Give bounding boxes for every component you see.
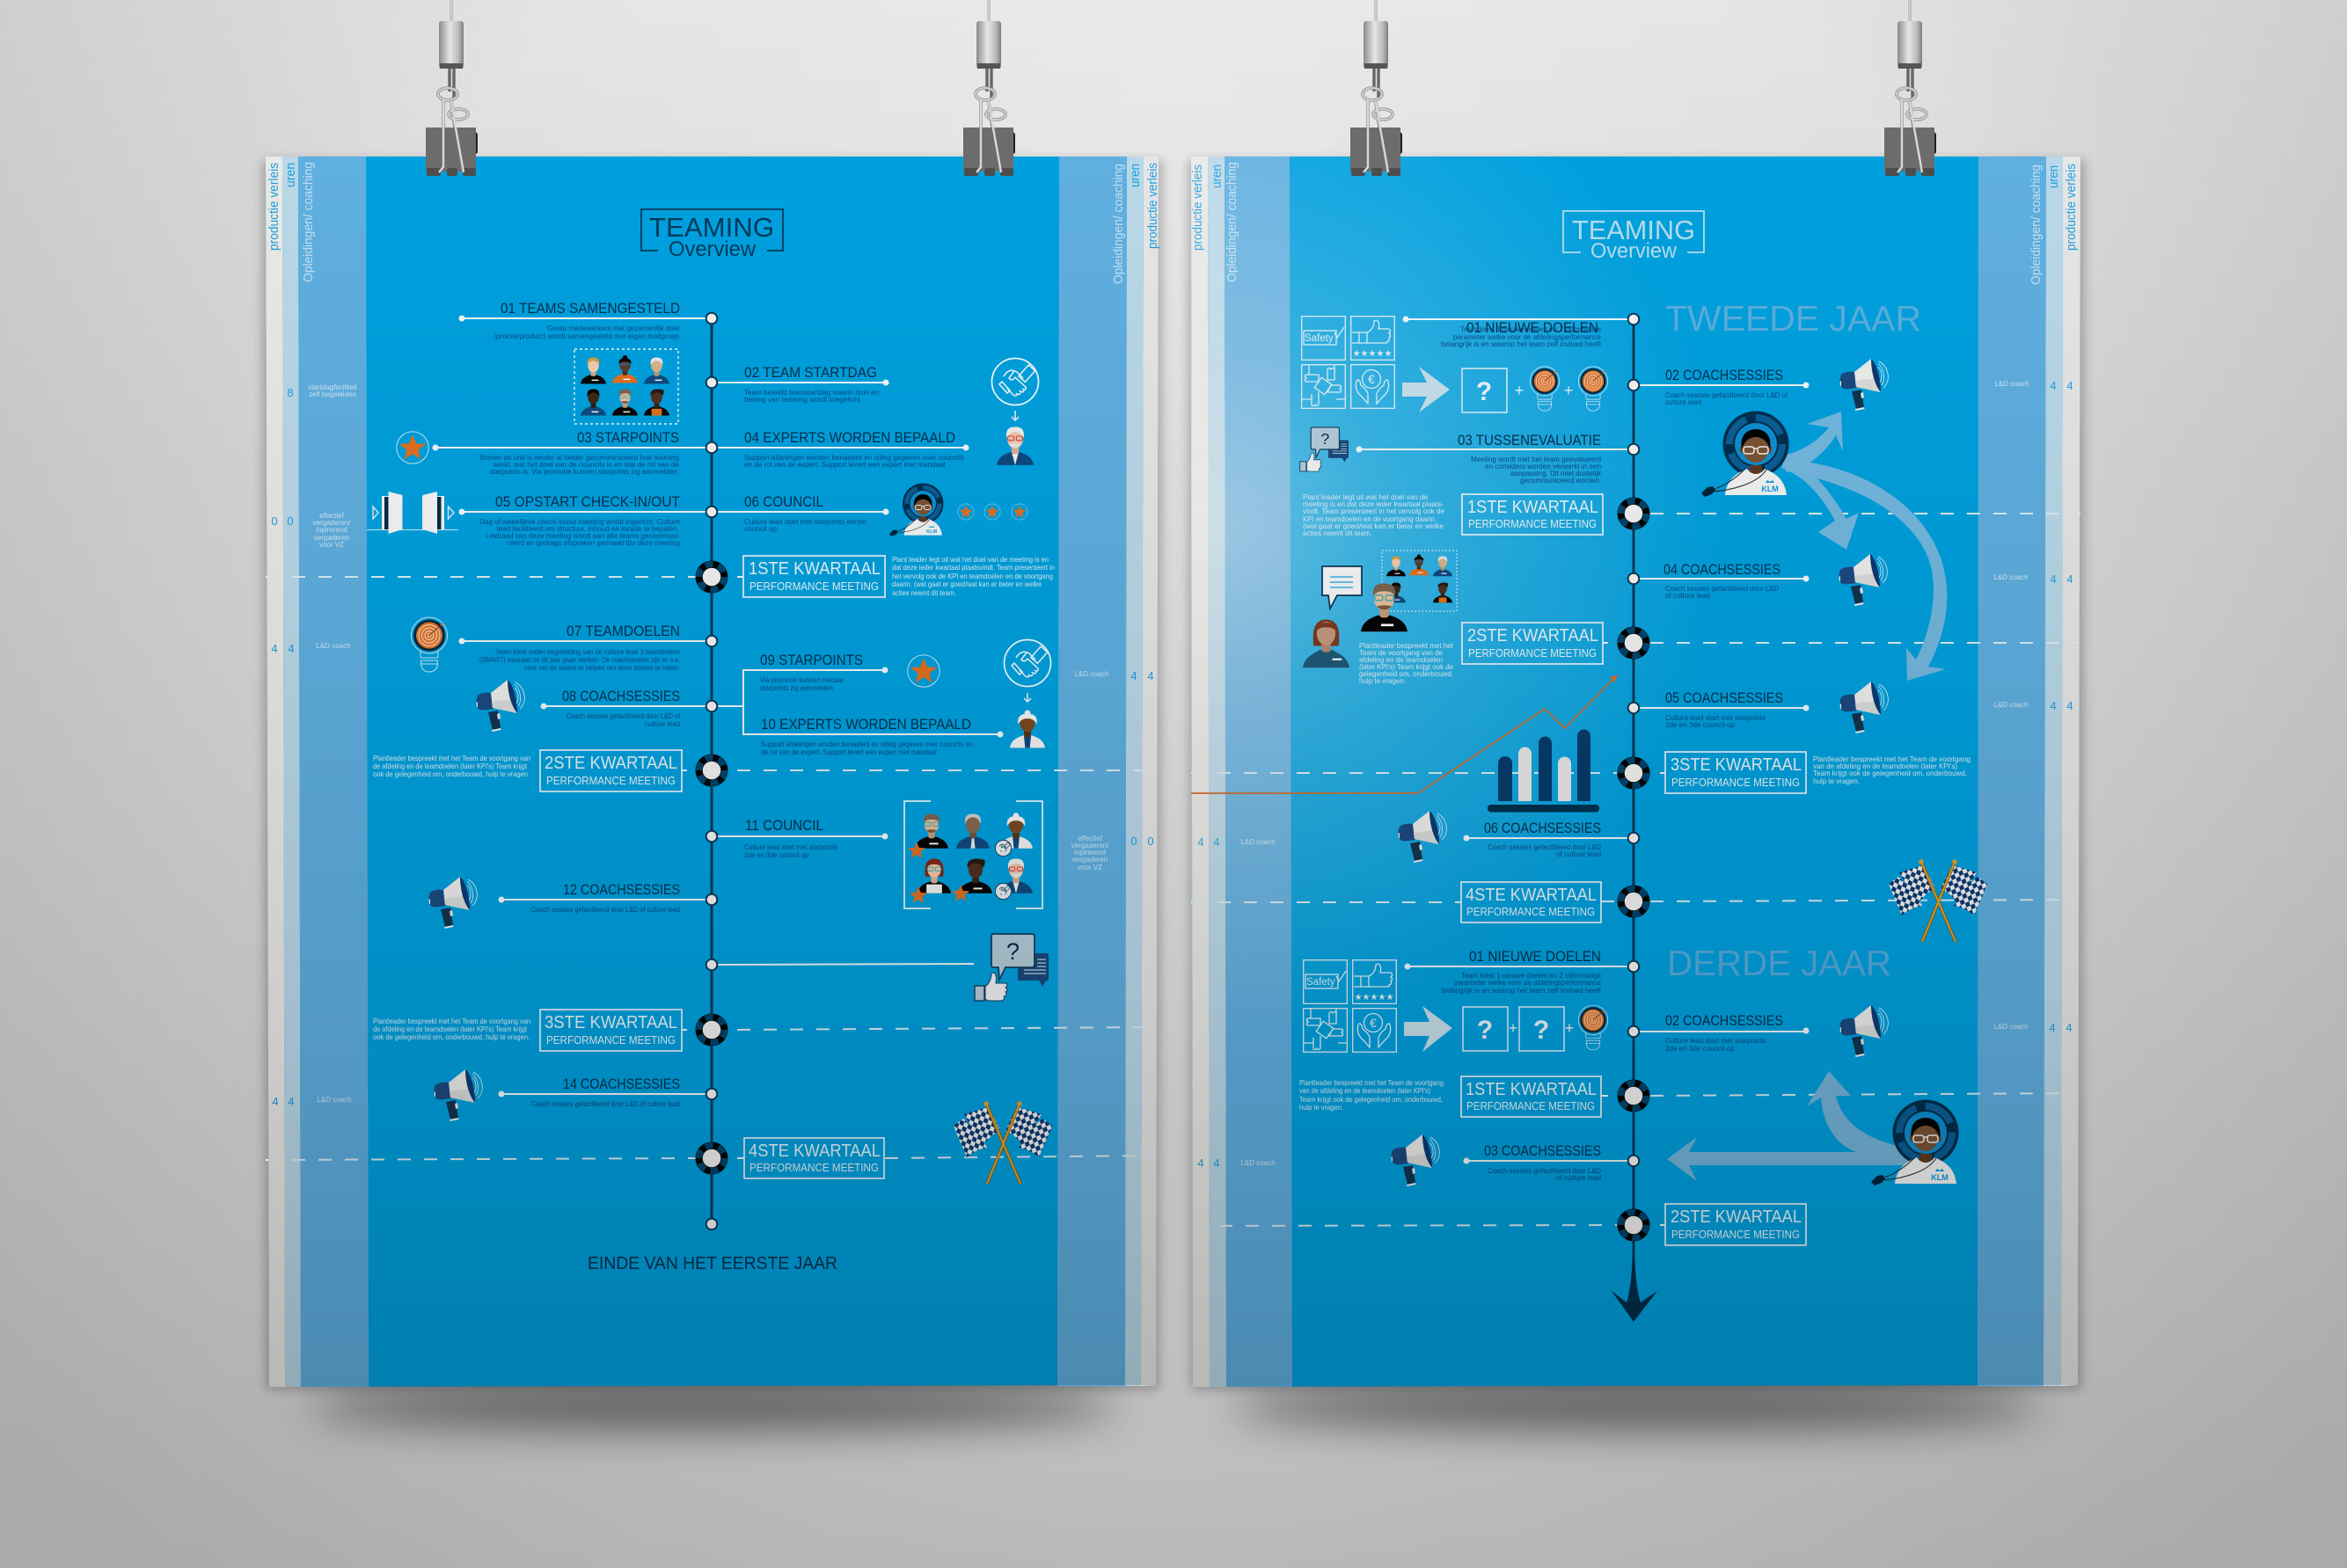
- step 06 council: council op: [744, 525, 778, 533]
- 2ste kwartaal box year 3: [1660, 1204, 1806, 1245]
- 2ste kwartaal box year 2: PERFORMANCE MEETING: [1468, 646, 1597, 660]
- 3ste kwartaal box year 2: [1660, 752, 1806, 793]
- plant leader meeting illustration: [1303, 551, 1457, 667]
- stripe notes left: 4: [1213, 835, 1220, 849]
- 1ste kwartaal description year 3: [1299, 1079, 1444, 1112]
- stripe notes left: 0: [287, 514, 294, 528]
- council portrait grid: [904, 801, 1042, 908]
- 3ste kwartaal description: ook de gelegenheid om, onderbouwd, hulp te vragen.: [373, 1033, 530, 1041]
- 1ste kwartaal box year 2: PERFORMANCE MEETING: [1468, 517, 1597, 530]
- 2ste kwartaal box year 2: 2STE KWARTAAL: [1467, 626, 1598, 645]
- year 3 step 01 nieuwe doelen: belangrijk is en waarop het team zelf invloed heeft: [1442, 987, 1602, 995]
- step 04 experts worden bepaald: 04 EXPERTS WORDEN BEPAALD: [744, 429, 955, 446]
- year 2 step 02 coachsessies: culture lead: [1665, 398, 1701, 406]
- year 2 goal icons: [1302, 317, 1608, 412]
- clips poster 2: [1350, 0, 1938, 176]
- year 2 step 02 coachsessies: Coach sessies gefaciliteerd door L&D of: [1665, 391, 1788, 399]
- stripe notes left: effectief: [319, 512, 345, 520]
- coach feedback arrows year 3: [1667, 1071, 1909, 1181]
- title poster 2: [1563, 211, 1704, 263]
- column headers left: [267, 162, 316, 282]
- column headers right: productie verleis: [2064, 164, 2079, 251]
- step 05 opstart check-in/out: 05 OPSTART CHECK-IN/OUT: [495, 493, 680, 510]
- stripe notes left: vergaderen/: [313, 519, 351, 527]
- stripe notes right: [1071, 669, 1154, 872]
- 2ste kwartaal description year 2: Plantleader bespreekt met het: [1359, 642, 1454, 650]
- stripe notes right: L&D coach: [1993, 1023, 2029, 1031]
- step 05 opstart check-in/out: Leidraad van deze meeting wordt aan alle teams gecommuni-: [486, 532, 680, 540]
- step 04 experts worden bepaald: Support afdelingen worden benaderd en uitleg gegeven over councils: [744, 454, 964, 462]
- team portrait grid: [574, 349, 678, 424]
- 2ste kwartaal box year 3: 2STE KWARTAAL: [1671, 1207, 1802, 1227]
- 4ste kwartaal box: PERFORMANCE MEETING: [749, 1161, 879, 1174]
- poster 1: first year: [266, 0, 1160, 1387]
- column headers left: uren: [1210, 164, 1225, 188]
- stripe notes left: L&D coach: [1240, 838, 1276, 846]
- step 09 starpoints: Via promotie kunnen nieuwe: [760, 676, 844, 684]
- 2ste kwartaal box: PERFORMANCE MEETING: [546, 774, 676, 787]
- 1ste kwartaal description year 3: hulp te vragen.: [1299, 1104, 1343, 1112]
- description 01: (proces/product) wordt samengesteld met eigen mailgroep: [494, 332, 680, 340]
- step 07 teamdoelen: Team kiest onder begeleiding van de culture lead 3 teamdoelen: [495, 648, 680, 656]
- year 2 step 02 coachsessies: 02 COACHSESSIES: [1665, 367, 1783, 383]
- column headers left: Opleidingen/ coaching: [301, 162, 316, 282]
- step 02 team startdag: belang van teaming wordt toegelicht: [744, 396, 861, 404]
- poster 2 right stripes: [1978, 157, 2080, 1386]
- 2ste kwartaal description year 2: afdeling en de teamdoelen: [1359, 656, 1443, 664]
- year 3 step 03 coachsessies: 03 COACHSESSIES: [1484, 1142, 1601, 1159]
- year 2 step 06 coachsessies: 06 COACHSESSIES: [1484, 820, 1601, 836]
- 2ste kwartaal description: ook de gelegenheid om, onderbouwd, hulp te vragen.: [373, 770, 530, 778]
- year 3 step 01 nieuwe doelen: parameter welke voor de afdelingsperformance: [1454, 979, 1602, 987]
- 1ste kwartaal description year 2: acties neemt dit team.: [1303, 529, 1372, 537]
- heading tweede jaar: TWEEDE JAAR: [1665, 298, 1921, 339]
- coach feedback arrows year 2: [1781, 412, 1947, 681]
- step 08 coachsessies: 08 COACHSESSIES: [562, 688, 680, 704]
- step 10 experts worden bepaald: Support afdelingen worden benaderd en uitleg gegeven over councils en: [761, 740, 973, 748]
- 1ste kwartaal description year 2: vindt. Team presenteert in het vervolg ook de: [1303, 507, 1444, 515]
- step 04 experts worden bepaald: [712, 429, 969, 469]
- column headers left: [1190, 162, 1239, 282]
- 1ste kwartaal description year 2: meeting is en dat deze ieder kwartaal plaats-: [1303, 500, 1444, 508]
- icon star 09: [908, 655, 940, 687]
- stripe notes left: zelf begeleiden: [309, 390, 356, 398]
- step 14 coachsessies: Coach sessies gefaciliteerd door L&D of culture lead: [531, 1100, 680, 1108]
- 3ste kwartaal description year 2: hulp te vragen.: [1813, 777, 1860, 785]
- step 06 council: Culture lead start met starpoints eerste: [744, 518, 867, 526]
- year 3 step 02 coachsessies: 2de en 3de council op: [1665, 1045, 1736, 1053]
- step 12 coachsessies: Coach sessies gefaciliteerd door L&D of culture lead: [531, 906, 680, 914]
- stripe notes right: L&D coach: [1993, 573, 2029, 581]
- year 2 step 03 tussenevaluatie: gecommuniceerd worden.: [1520, 477, 1601, 485]
- step 08 coachsessies: [477, 680, 712, 732]
- 2ste kwartaal box: [540, 750, 687, 791]
- coach figure year 3: [1871, 1099, 1958, 1185]
- poster 1 background: [266, 157, 1159, 1387]
- nodes poster 1: [695, 313, 728, 1229]
- step 12 coachsessies: [429, 877, 712, 929]
- stripe notes left: 0: [271, 514, 278, 528]
- step 09 starpoints: 09 STARPOINTS: [760, 652, 863, 668]
- poster 2 light falloff: [1191, 157, 2080, 1387]
- step 07 teamdoelen: [412, 617, 712, 672]
- step 02 team startdag: Team beleefd teamstartdag waarin doel en: [744, 389, 879, 397]
- year 2 step 06 coachsessies: Coach sessies gefaciliteerd door L&D: [1488, 843, 1601, 851]
- poster 2 background: [1191, 157, 2080, 1387]
- step 06 council: 06 COUNCIL: [744, 493, 823, 510]
- poster shadows: [262, 160, 2085, 1428]
- step 01 teams samengesteld: [459, 300, 712, 340]
- 1ste kwartaal box year 2: 1STE KWARTAAL: [1467, 498, 1598, 517]
- year 3 step 01 nieuwe doelen: [1404, 948, 1634, 995]
- title poster 1: Overview: [669, 237, 757, 261]
- year 2 step 01 nieuwe doelen: 01 NIEUWE DOELEN: [1466, 319, 1598, 336]
- stripe notes right: L&D coach: [1994, 380, 2029, 388]
- 1ste kwartaal description year 3: Plantleader bespreekt met het Team de voortgang: [1299, 1079, 1444, 1087]
- year 2 step 03 tussenevaluatie: en considers worden verwerkt in een: [1485, 463, 1601, 470]
- year 3 step 01 nieuwe doelen: 01 NIEUWE DOELEN: [1469, 948, 1601, 965]
- step 06 council: [712, 493, 888, 533]
- stripe notes right: 4: [2066, 573, 2073, 586]
- goal formula: [1462, 367, 1608, 412]
- 1ste kwartaal box year 3: 1STE KWARTAAL: [1466, 1080, 1597, 1099]
- step 11 council: [712, 817, 888, 859]
- 3ste kwartaal box: [540, 1010, 687, 1051]
- spine poster 2 with arrow: [1612, 319, 1657, 1322]
- 3ste kwartaal description: [373, 1017, 530, 1041]
- stripe notes left: L&D coach: [317, 1096, 352, 1104]
- column headers left: Opleidingen/ coaching: [1225, 162, 1239, 282]
- step 11 council: Culture lead start met starpoints: [744, 843, 837, 851]
- step 03 starpoints: 03 STARPOINTS: [577, 429, 679, 446]
- year 3 step 03 coachsessies: of culture lead: [1556, 1174, 1601, 1182]
- icon coach with three stars: [889, 483, 1027, 536]
- 1ste kwartaal box: 1STE KWARTAAL: [749, 559, 881, 579]
- 1ste kwartaal box year 3: [1461, 1076, 1608, 1117]
- year 2 step 01 nieuwe doelen: Team kiest 3 nieuwe doelen en 1 cijfermatige: [1460, 325, 1602, 333]
- year 2 step 02 coachsessies: [1634, 359, 1888, 411]
- stripe notes left: vergaderen: [314, 534, 349, 542]
- 2ste kwartaal description year 2: [1359, 642, 1454, 685]
- step 03 starpoints: starpoints is. Via promotie kunnen starpoints zig aanmelden.: [490, 468, 679, 476]
- 1ste kwartaal description: acties neemt dit team.: [892, 589, 956, 597]
- year 2 step 03 tussenevaluatie: Meeting wordt met het team geevalueerd: [1471, 456, 1601, 463]
- 1ste kwartaal box year 3: PERFORMANCE MEETING: [1466, 1099, 1595, 1112]
- stripe notes right: voor VZ: [1078, 864, 1102, 872]
- year 2 step 04 coachsessies: 04 COACHSESSIES: [1663, 561, 1780, 578]
- step 07 teamdoelen: voor om de teams te helpen om deze doelen te halen.: [524, 664, 680, 672]
- 1ste kwartaal description year 2: (wat gaat er goed/wat kan er beter en welke: [1303, 522, 1444, 530]
- stripe notes left: [271, 383, 358, 1108]
- column headers left: uren: [283, 163, 298, 187]
- stripe notes left: 4: [1197, 835, 1204, 849]
- stripe notes left: 8: [287, 386, 294, 399]
- column headers right: [1111, 163, 1160, 284]
- year 2 step 06 coachsessies: of culture lead: [1556, 850, 1601, 858]
- column headers left: productie verleis: [267, 163, 281, 251]
- 1ste kwartaal description: het vervolg ook de KPI en teamdoelen en de voortgang: [892, 573, 1053, 580]
- 2ste kwartaal description: de afdeling en de teamdoelen (later KPI's) Team krijgt: [373, 762, 528, 770]
- step 07 teamdoelen: 07 TEAMDOELEN: [567, 623, 680, 639]
- year 2 step 03 tussenevaluatie: [1300, 427, 1634, 485]
- icon checkered flags year 2: [1889, 859, 1987, 942]
- 4ste kwartaal box: [737, 1138, 884, 1178]
- poster 1 left stripes: [266, 157, 369, 1387]
- 2ste kwartaal description year 2: (later KPI's) Team krijgt ook de: [1359, 663, 1453, 671]
- step 05 opstart check-in/out: [367, 492, 712, 547]
- stripe notes left: startdagfaciliteit: [308, 383, 358, 391]
- stripe notes right: vergaderen/: [1071, 842, 1109, 850]
- poster 2 left stripes: [1191, 157, 1292, 1387]
- description 01: Groep medewerkers met gezamenlijk doel: [547, 325, 679, 332]
- icon star: [397, 432, 428, 463]
- 4ste kwartaal box: 4STE KWARTAAL: [749, 1141, 881, 1161]
- goal formula: +: [1565, 1019, 1574, 1037]
- step 11 council: 2de en 3de council op: [744, 851, 809, 859]
- poster 1 right stripes: [1057, 157, 1159, 1386]
- stripe notes right: 4: [2050, 573, 2057, 586]
- 1ste kwartaal description: dat deze ieder kwartaal plaatsvindt. Team presenteert in: [892, 564, 1055, 572]
- stripe notes right: 4: [1130, 669, 1137, 682]
- year 2 step 04 coachsessies: of culture lead: [1665, 592, 1710, 600]
- step 10 experts worden bepaald: 10 EXPERTS WORDEN BEPAALD: [761, 716, 971, 733]
- year 2 step 01 nieuwe doelen: belangrijk is en waarop het team zelf invloed heeft: [1441, 340, 1602, 348]
- poster 2 left glow: [1191, 157, 1736, 1036]
- 1ste kwartaal description year 2: KPI en teamdoelen en de voortgang daarin.: [1303, 515, 1437, 523]
- stripe notes right: inpirerend: [1074, 849, 1106, 857]
- stripe notes right: 4: [1147, 669, 1154, 682]
- stripe notes right: 4: [2066, 699, 2073, 712]
- poster 2: second and third year: [1190, 0, 2080, 1387]
- year 2 step 03 tussenevaluatie: 03 TUSSENEVALUATIE: [1458, 432, 1601, 449]
- icon target bulb: [412, 617, 447, 672]
- stripe notes left: voor VZ: [319, 541, 344, 549]
- column headers right: [2029, 164, 2079, 285]
- arrow to goals: [1402, 367, 1450, 412]
- step 09 starpoints: [760, 652, 863, 692]
- 2ste kwartaal description: Plantleader bespreekt met het Team de voortgang van: [373, 755, 530, 762]
- stripe notes right: vergaderen: [1072, 856, 1108, 864]
- step 03 starpoints: werkt, wat het doel van de councils is en wat de rol van de: [492, 461, 680, 469]
- 3ste kwartaal box year 2: PERFORMANCE MEETING: [1671, 776, 1800, 789]
- goal formula: [1463, 1005, 1608, 1051]
- goal formula: +: [1515, 382, 1524, 399]
- icon checkered flags: [954, 1101, 1052, 1184]
- year 2 step 06 coachsessies: [1399, 811, 1634, 863]
- 2ste kwartaal box: 2STE KWARTAAL: [545, 754, 677, 773]
- year 3 step 01 nieuwe doelen: Team kiest 1 nieuwe doelen en 2 cijfermatige: [1461, 972, 1602, 980]
- 1ste kwartaal description: daarin. (wat gaat er goed/wat kan er beter en welke: [892, 580, 1042, 588]
- stripe notes right: 0: [1147, 835, 1154, 848]
- step 03 starpoints: Binnen de unit is eerder al helder gecomminiceerd hoe teaming: [479, 454, 679, 462]
- step 12 coachsessies: 12 COACHSESSIES: [563, 881, 680, 898]
- step 05 opstart check-in/out: Dag of wekelijkse check-in/out meeting wordt ingericht. Culture: [479, 518, 681, 526]
- quarter dashed lines poster 2: [1191, 514, 2080, 1226]
- 1ste kwartaal description year 3: Team krijgt ook de gelegenheid om, onderbouwd,: [1299, 1096, 1443, 1104]
- 3ste kwartaal description year 2: [1813, 755, 1970, 785]
- column headers right: Opleidingen/ coaching: [1111, 164, 1126, 284]
- 4ste kwartaal box year 2: PERFORMANCE MEETING: [1466, 905, 1595, 918]
- step 08 coachsessies: Coach sessies gefaciliteerd door L&D of: [567, 712, 681, 720]
- stripe notes left: [1197, 835, 1276, 1170]
- arrow to goals: [1404, 1006, 1452, 1052]
- stripe notes left: 4: [1213, 1156, 1220, 1170]
- stripe notes left: 4: [271, 642, 278, 655]
- step 05 opstart check-in/out: ceerd en gedrags afspraken gemaakt tbv deze meeting: [507, 539, 680, 547]
- stripe notes left: L&D coach: [316, 642, 351, 650]
- goal formula: ?: [1476, 377, 1492, 406]
- 3ste kwartaal box: 3STE KWARTAAL: [545, 1013, 677, 1032]
- orange trend line: [1191, 675, 1618, 793]
- 4ste kwartaal box year 2: [1461, 882, 1601, 923]
- column headers left: productie verleis: [1190, 164, 1205, 251]
- year 3 step 03 coachsessies: [1392, 1134, 1634, 1186]
- stripe notes left: L&D coach: [1240, 1159, 1276, 1167]
- year 3 step 03 coachsessies: Coach sessies gefaciliteerd door L&D: [1488, 1167, 1601, 1175]
- year 3 step 02 coachsessies: [1634, 1005, 1888, 1057]
- 1ste kwartaal description: [892, 556, 1055, 597]
- bracket steps 09 and 10: [712, 652, 1003, 756]
- 1ste kwartaal description year 3: van de afdeling en de teamdoelen (later KPI's): [1299, 1087, 1430, 1095]
- 3ste kwartaal description year 2: Plantleader bespreekt met het Team de voortgang: [1813, 755, 1970, 763]
- stripe notes right: 4: [2050, 379, 2057, 392]
- icon megaphone: [477, 680, 524, 732]
- 1ste kwartaal description year 2: Plant leader legt uit wat het doel van de: [1303, 493, 1428, 501]
- end of first year caption: EINDE VAN HET EERSTE JAAR: [588, 1254, 837, 1273]
- year 2 step 04 coachsessies: Coach sessies gefaciliteerd door L&D: [1665, 585, 1779, 593]
- column headers right: productie verleis: [1145, 163, 1160, 249]
- title poster 2: TEAMING: [1572, 215, 1695, 245]
- icon doors: [367, 492, 458, 534]
- step 14 coachsessies: [435, 1069, 712, 1121]
- growth bar chart: [1488, 730, 1599, 813]
- 2ste kwartaal box year 3: PERFORMANCE MEETING: [1671, 1228, 1800, 1241]
- title poster 1: TEAMING: [649, 212, 774, 243]
- coach figure year 2: [1701, 412, 1789, 497]
- heading derde jaar: DERDE JAAR: [1667, 943, 1891, 983]
- stripe notes right: 4: [2066, 1021, 2073, 1034]
- step 09 starpoints: starpoints zig aanmelden.: [760, 684, 835, 692]
- stripe notes right: L&D coach: [1074, 670, 1109, 678]
- 3ste kwartaal description year 2: van de afdeling en de teamdoelen (later KPI's): [1813, 762, 1957, 770]
- step 10 experts worden bepaald: [761, 716, 973, 756]
- heading 01: 01 TEAMS SAMENGESTELD: [501, 300, 680, 317]
- column headers right: Opleidingen/ coaching: [2029, 164, 2044, 285]
- year 2 step 04 coachsessies: [1634, 554, 1887, 606]
- poster 1 light falloff: [266, 157, 1159, 1387]
- year 3 step 02 coachsessies: 02 COACHSESSIES: [1665, 1012, 1783, 1029]
- step 10 experts worden bepaald: de rol van de expert. Support levert een expert met mandaat: [761, 748, 938, 756]
- year 2 step 03 tussenevaluatie: aanpassing. Dit miet duidelijk: [1510, 470, 1602, 478]
- step 07 teamdoelen: (SMART) waaraan ze dit jaar gaan werken. De coachsessies zijn er o.a.: [479, 656, 680, 664]
- stripe notes right: L&D coach: [1993, 701, 2029, 709]
- title poster 1: [641, 209, 783, 261]
- step 03 starpoints: [397, 429, 712, 476]
- 3ste kwartaal box year 2: 3STE KWARTAAL: [1671, 755, 1802, 775]
- stripe notes left: inpirerend: [316, 526, 347, 534]
- goal formula: ?: [1533, 1016, 1549, 1045]
- 1ste kwartaal box: [737, 556, 885, 597]
- spine poster 1: [711, 318, 713, 1224]
- 2ste kwartaal description year 2: hulp te vragen.: [1359, 677, 1406, 685]
- stripe notes right: 4: [2049, 1021, 2056, 1034]
- 2ste kwartaal description year 2: Team de voortgang van de: [1359, 649, 1443, 657]
- column headers right: uren: [1128, 164, 1143, 187]
- icon handshake to expert 10: [1005, 640, 1050, 748]
- year 2 step 05 coachsessies: 05 COACHSESSIES: [1665, 689, 1783, 706]
- stripe notes right: 0: [1130, 835, 1137, 848]
- year 3 goal icons: [1304, 960, 1608, 1052]
- 3ste kwartaal description: de afdeling en de teamdoelen (later KPI's) Team krijgt: [373, 1025, 528, 1033]
- 2ste kwartaal description: [373, 755, 530, 778]
- stripe notes right: 4: [2066, 379, 2073, 392]
- 1ste kwartaal box: PERFORMANCE MEETING: [749, 580, 879, 593]
- 3ste kwartaal description: Plantleader bespreekt met het Team de voortgang van: [373, 1017, 530, 1025]
- year 2 step 01 nieuwe doelen: [1402, 317, 1634, 348]
- step 02 team startdag: [712, 364, 888, 404]
- stripe notes left: 4: [272, 1095, 279, 1108]
- step 11 council: 11 COUNCIL: [745, 817, 823, 834]
- 1ste kwartaal description: Plant leader legt uit wat het doel van de meeting is en: [892, 556, 1049, 564]
- 3ste kwartaal description year 2: Team krijgt ook de gelegenheid om, onderbouwd,: [1813, 769, 1967, 777]
- speech bubble: [1322, 566, 1362, 609]
- evaluation line and icon: [712, 934, 1049, 1001]
- year 2 step 05 coachsessies: Culture lead start met starpoints: [1665, 714, 1766, 722]
- nodes poster 2: [1617, 314, 1650, 1242]
- step 14 coachsessies: 14 COACHSESSIES: [563, 1076, 680, 1092]
- description 01: [494, 325, 680, 340]
- quarter dashed lines poster 1: [266, 577, 1159, 1160]
- goal formula: ?: [1477, 1016, 1493, 1045]
- title poster 2: Overview: [1590, 239, 1678, 263]
- 3ste kwartaal box: PERFORMANCE MEETING: [546, 1033, 676, 1047]
- stripe notes left: 4: [288, 1095, 295, 1108]
- 1ste kwartaal description year 2: [1303, 493, 1444, 537]
- year 2 step 05 coachsessies: 2de en 3de council op: [1665, 721, 1736, 729]
- clips poster 1: [426, 0, 1017, 176]
- goal formula: +: [1509, 1019, 1517, 1037]
- 1ste kwartaal box year 2: [1462, 494, 1603, 535]
- year 2 step 01 nieuwe doelen: parameter welke voor de afdelingsperformance: [1453, 333, 1602, 341]
- 2ste kwartaal box year 2: [1462, 623, 1608, 664]
- column headers right: uren: [2046, 165, 2061, 188]
- icon handshake to expert: [992, 359, 1038, 465]
- 4ste kwartaal box year 2: 4STE KWARTAAL: [1466, 886, 1597, 905]
- step 04 experts worden bepaald: en de rol van de expert. Support levert een expert met mandaat: [744, 461, 947, 469]
- step 05 opstart check-in/out: lead faciliteerd om structuur, inhoud en locatie te bepalen.: [497, 525, 679, 533]
- step 02 team startdag: 02 TEAM STARTDAG: [744, 364, 877, 381]
- stripe notes left: 4: [1197, 1156, 1204, 1170]
- 2ste kwartaal description year 2: gelegenheid om, onderbouwd,: [1359, 670, 1453, 678]
- stripe notes left: 4: [288, 642, 295, 655]
- step 08 coachsessies: culture lead: [645, 720, 680, 728]
- stripe notes right: effectief: [1078, 835, 1103, 842]
- stripe notes right: 4: [2050, 699, 2057, 712]
- year 2 step 05 coachsessies: [1634, 682, 1888, 733]
- year 3 step 02 coachsessies: Culture lead start met starpoints: [1665, 1037, 1766, 1045]
- stripe notes right: [1993, 379, 2073, 1034]
- goal formula: +: [1564, 382, 1573, 399]
